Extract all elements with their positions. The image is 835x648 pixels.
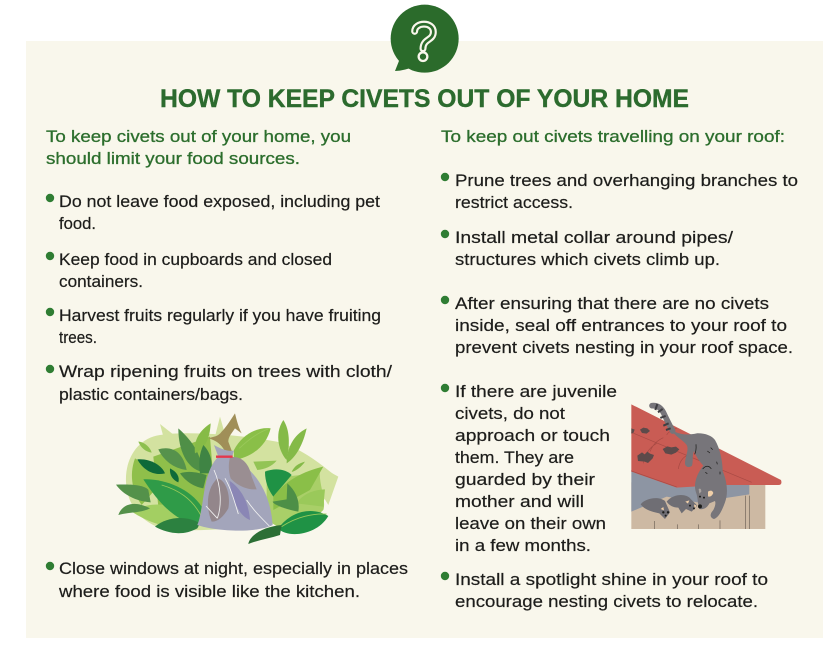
bullet: juvenile civets: guarded by their: [455, 470, 595, 489]
left column intro heading: To keep civets out of your home, you: [46, 127, 351, 146]
bullet: seal entrances: inside, seal off entrances to your roof to: [455, 316, 787, 335]
bullet: prune trees: [441, 171, 798, 212]
bullet: cupboards: Keep food in cupboards and closed: [59, 250, 332, 269]
bullet: cupboards: containers.: [59, 272, 143, 291]
bullet: juvenile civets: approach or touch: [455, 426, 610, 445]
bullet: metal collar: [441, 228, 733, 269]
bullet: juvenile civets: in a few months.: [455, 536, 591, 555]
bullet: spotlight: encourage nesting civets to relocate.: [455, 592, 758, 611]
bullet: metal collar: Install metal collar around pipes/: [455, 228, 733, 247]
bullet: exposed food: food.: [59, 214, 96, 233]
illustration: fruit wrapped in a bag among leaves: [116, 413, 338, 544]
bullet: juvenile civets: [441, 382, 617, 555]
bullet: juvenile civets: civets, do not: [455, 404, 565, 423]
title: HOW TO KEEP CIVETS OUT OF YOUR HOME: [160, 85, 689, 113]
bullet: wrap fruits: plastic containers/bags.: [59, 385, 243, 404]
bullet: spotlight: [441, 570, 768, 611]
bullet: close windows: [46, 559, 408, 601]
bullet: exposed food: [46, 192, 380, 233]
left column intro heading: [46, 127, 351, 168]
bullet: close windows: where food is visible like the kitchen.: [58, 582, 360, 601]
bullet: seal entrances: After ensuring that there are no civets: [455, 294, 769, 313]
bullet: close windows: Close windows at night, especially in places: [59, 559, 408, 578]
bullet: harvest fruits: trees.: [59, 328, 97, 347]
icon: question mark speech bubble: [391, 5, 459, 73]
bullet: spotlight: Install a spotlight shine in your roof to: [455, 570, 768, 589]
bullet: harvest fruits: [46, 306, 381, 347]
bullet: juvenile civets: mother and will: [455, 492, 584, 511]
bullet: wrap fruits: Wrap ripening fruits on trees with cloth/: [59, 362, 392, 381]
bullet: juvenile civets: If there are juvenile: [455, 382, 617, 401]
left column intro heading: should limit your food sources.: [46, 149, 300, 168]
illustration: civet and juveniles on a roof: [631, 404, 781, 529]
bullet: exposed food: Do not leave food exposed, including pet: [59, 192, 380, 211]
bullet: seal entrances: [441, 294, 793, 357]
right column intro heading: To keep out civets travelling on your roof:: [441, 127, 785, 146]
bullet: wrap fruits: [46, 362, 392, 404]
bullet: prune trees: restrict access.: [455, 193, 573, 212]
bullet: cupboards: [46, 250, 332, 291]
bullet: prune trees: Prune trees and overhanging branches to: [455, 171, 798, 190]
bullet: metal collar: structures which civets climb up.: [455, 250, 720, 269]
bullet: seal entrances: prevent civets nesting in your roof space.: [455, 338, 793, 357]
bullet: juvenile civets: them. They are: [455, 448, 574, 467]
bullet: juvenile civets: leave on their own: [455, 514, 606, 533]
bullet: harvest fruits: Harvest fruits regularly if you have fruiting: [59, 306, 381, 325]
